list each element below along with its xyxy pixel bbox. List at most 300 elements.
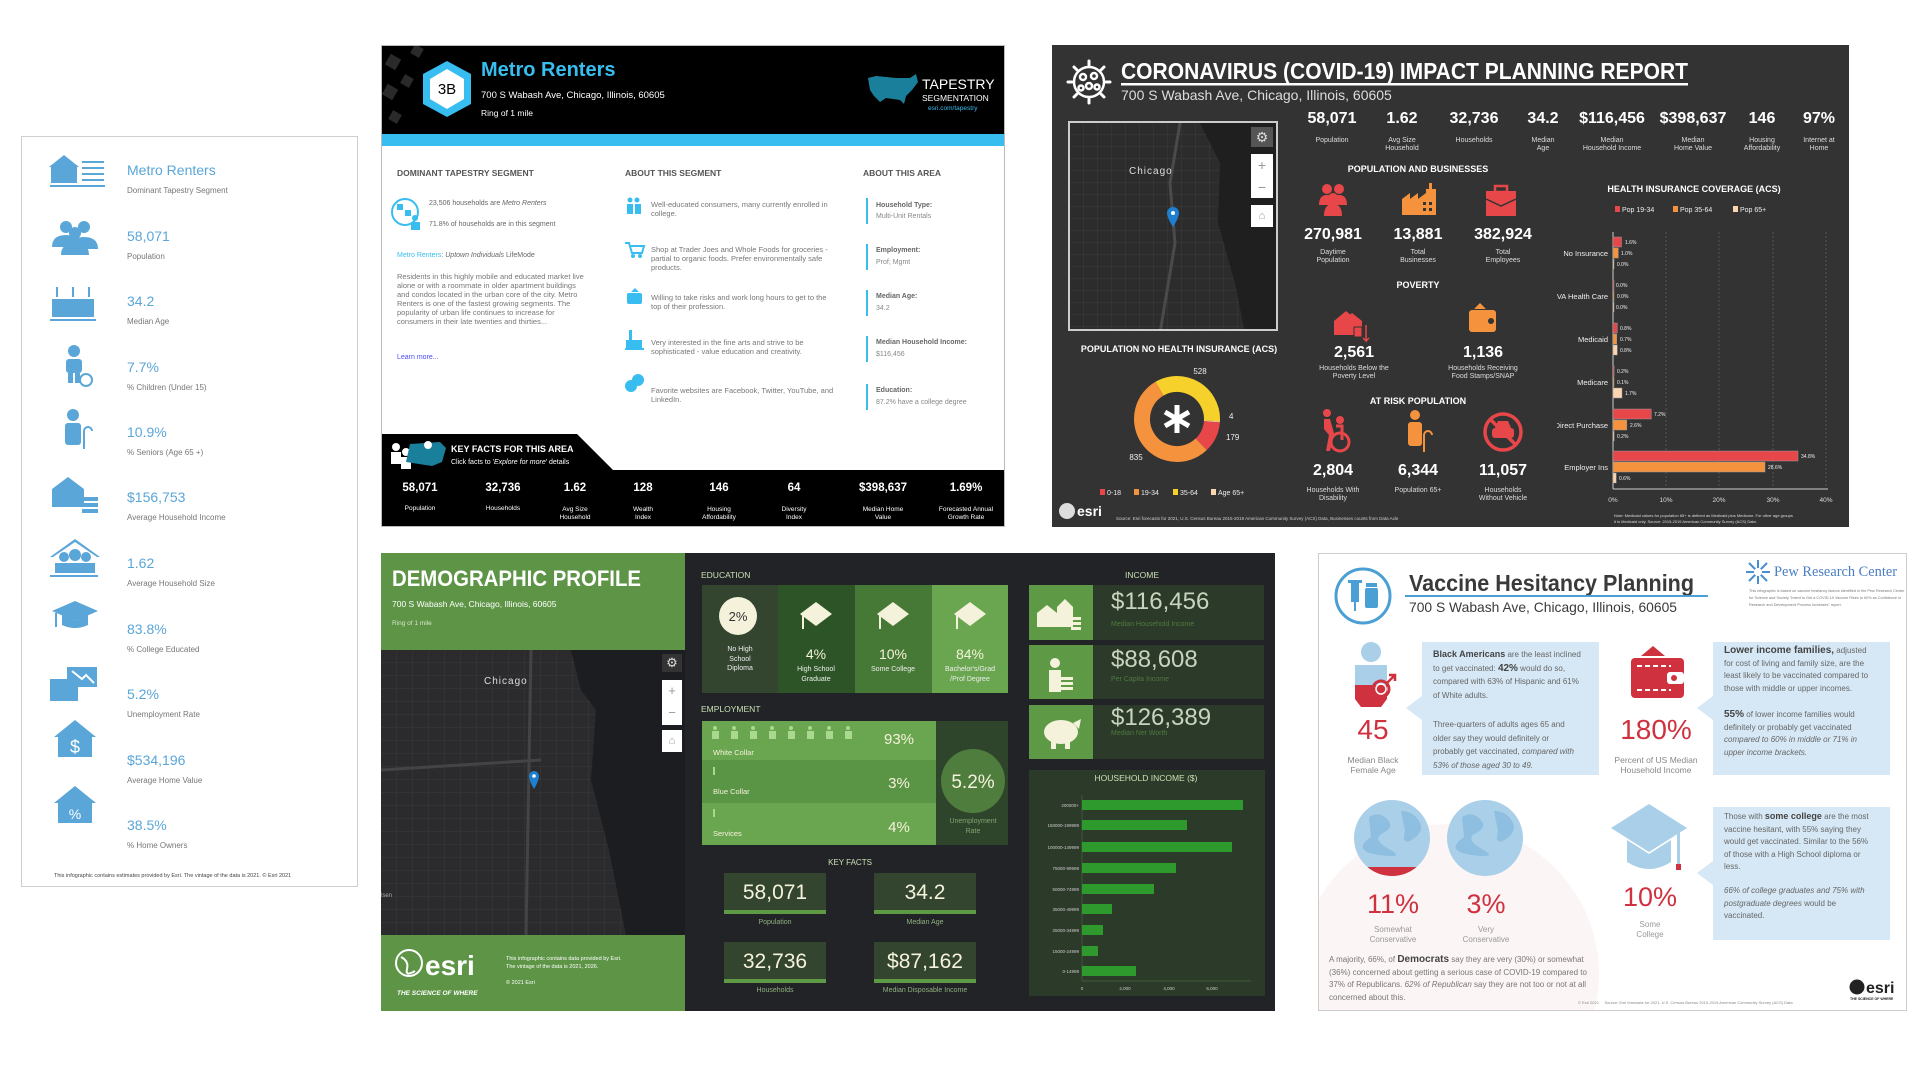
callout: black americans: of White adults. bbox=[1433, 690, 1488, 700]
panel: COVID-19 impact planning report: Avg Size bbox=[1388, 137, 1416, 144]
income section: Median Household Income bbox=[1111, 621, 1194, 628]
education section: School bbox=[729, 656, 751, 662]
panel: COVID-19 impact planning report: 32,736 bbox=[1450, 110, 1498, 127]
key facts band: Housing bbox=[707, 506, 731, 513]
panel: key facts list: $534,196 bbox=[127, 752, 185, 768]
key facts band: Avg Size bbox=[562, 506, 588, 513]
employment section bbox=[701, 704, 1008, 845]
text block: democrats bbox=[1329, 954, 1587, 1002]
callout: some college: less. bbox=[1724, 862, 1740, 871]
callout: lower income families: upper income brackets. bbox=[1724, 748, 1807, 756]
employment section: Blue Collar bbox=[713, 787, 750, 796]
key facts band: 146 bbox=[709, 482, 729, 494]
at risk population: 11,057 bbox=[1479, 462, 1527, 479]
donut section: 4 bbox=[1229, 412, 1234, 421]
column: dominant segment bbox=[391, 168, 584, 361]
stat: median black female age: Female Age bbox=[1350, 765, 1396, 775]
esri logo + source: esri bbox=[1077, 503, 1102, 519]
column: dominant segment: Metro Renters: Uptown Individuals LifeMode bbox=[397, 252, 535, 259]
key facts band: Household bbox=[559, 514, 591, 521]
callout: lower income families: for cost of living and family size, are the bbox=[1724, 658, 1864, 668]
globes: conservative: Conservative bbox=[1463, 935, 1509, 944]
column: about this area: Multi-Unit Rentals bbox=[876, 213, 931, 220]
panel: COVID-19 impact planning report: 700 S Wabash Ave, Chicago, Illinois, 60605 bbox=[1121, 87, 1392, 103]
callout: black americans: older say they would definitely or bbox=[1433, 734, 1549, 742]
panel: key facts list: $156,753 bbox=[127, 489, 185, 505]
map: + bbox=[668, 683, 676, 698]
panel: key facts list: % Home Owners bbox=[127, 841, 187, 850]
population and businesses: Employees bbox=[1486, 257, 1520, 264]
green footer with esri logo: © 2021 Esri bbox=[506, 980, 535, 986]
panel: key facts list: Average Home Value bbox=[127, 776, 202, 785]
bar chart: health insurance coverage: 10% bbox=[1659, 497, 1673, 504]
key facts band: Index bbox=[786, 514, 802, 521]
panel: key facts list: Unemployment Rate bbox=[127, 710, 200, 719]
column: about this segment bbox=[625, 168, 833, 404]
footer note: This infographic contains estimates provided by Esri. The vintage of the data is 2021. © Esri 2021 bbox=[54, 873, 291, 879]
bar chart: health insurance coverage: 0.2% bbox=[1617, 369, 1629, 375]
bar chart: health insurance coverage: Medicaid bbox=[1578, 335, 1608, 344]
bar chart: health insurance coverage: 0.7% bbox=[1620, 337, 1632, 343]
employment section: 93% bbox=[884, 731, 914, 748]
employment section: Rate bbox=[966, 828, 980, 835]
panel: demographic profile bbox=[381, 553, 1275, 1011]
key facts band: Click facts to 'Explore for more' details bbox=[451, 459, 569, 466]
income section: $88,608 bbox=[1111, 646, 1198, 673]
map bbox=[1068, 121, 1278, 331]
callout: lower income families: those with middle or upper incomes. bbox=[1724, 684, 1852, 692]
stat: median black female age: 45 bbox=[1357, 714, 1389, 745]
panel: key facts list: Median Age bbox=[127, 317, 169, 326]
key facts band: 1.69% bbox=[950, 482, 982, 494]
icon column: % bbox=[69, 806, 81, 822]
at risk population: Disability bbox=[1319, 495, 1347, 502]
donut section: Age 65+ bbox=[1218, 490, 1244, 497]
key facts: $87,162 bbox=[887, 950, 963, 973]
esri logo + source bbox=[1059, 503, 1398, 521]
bar chart: health insurance coverage: 0.1% bbox=[1617, 380, 1629, 386]
stat: some college: 10% bbox=[1623, 882, 1677, 912]
header band: 700 S Wabash Ave, Chicago, Illinois, 60605 bbox=[481, 90, 665, 101]
bar chart: household income: 2,000 bbox=[1119, 986, 1131, 991]
population and businesses: Total bbox=[1411, 249, 1425, 256]
green footer with esri logo bbox=[381, 935, 685, 1011]
panel: key facts list: Metro Renters bbox=[127, 162, 216, 178]
green header: Ring of 1 mile bbox=[392, 620, 432, 627]
icon: vaccine circle bbox=[1334, 568, 1392, 624]
callout: some college: vaccinated. bbox=[1724, 911, 1764, 920]
column: dominant segment: Learn more... bbox=[397, 354, 439, 361]
bar chart: health insurance coverage: 30% bbox=[1766, 497, 1780, 504]
column: about this segment: Favorite websites are Facebook, Twitter, YouTube, and LinkedIn. bbox=[651, 386, 833, 404]
icon: virus bbox=[1066, 60, 1112, 104]
column: about this segment: Willing to take risks and work long hours to get to the top of their profession. bbox=[651, 293, 827, 311]
header band: Metro Renters bbox=[481, 59, 615, 81]
callout: lower income families: least likely to be vaccinated compared to bbox=[1724, 671, 1868, 680]
poverty: Households Below the bbox=[1319, 365, 1389, 372]
globes: conservative: Very bbox=[1478, 925, 1494, 934]
panel: key facts list: Population bbox=[127, 252, 165, 261]
callout: black americans: 53% of those aged 30 to 49. bbox=[1433, 760, 1533, 770]
stat: some college: Some bbox=[1640, 920, 1660, 929]
green footer with esri logo: This infographic contains data provided by Esri. bbox=[506, 956, 622, 962]
employment section: Services bbox=[713, 829, 742, 838]
tapestry logo bbox=[868, 74, 995, 112]
esri logo: THE SCIENCE OF WHERE bbox=[1850, 997, 1894, 1001]
panel: COVID-19 impact planning report: Median bbox=[1601, 137, 1623, 144]
panel: Metro Renters tapestry bbox=[381, 45, 1005, 527]
callout: lower income families: definitely or probably get vaccinated bbox=[1724, 722, 1852, 732]
bar chart: health insurance coverage: it is Medicaid only. Source: 2015-2019 American Community Survey (ACS) Data. bbox=[1614, 519, 1757, 524]
column: about this area: 34.2 bbox=[876, 305, 890, 312]
key facts: KEY FACTS bbox=[828, 858, 872, 867]
key facts band: 64 bbox=[788, 482, 800, 494]
education section bbox=[701, 570, 1008, 693]
panel: key facts list: 10.9% bbox=[127, 424, 167, 440]
bar chart: health insurance coverage: 34.8% bbox=[1801, 454, 1816, 460]
key facts band: 32,736 bbox=[485, 482, 521, 494]
bar chart: household income: 100000-149999 bbox=[1047, 845, 1079, 850]
map: ⌂ bbox=[1259, 210, 1265, 222]
bar chart: health insurance coverage: Employer Ins bbox=[1564, 463, 1608, 472]
globes: conservative: 11% bbox=[1367, 889, 1419, 919]
panel: COVID-19 impact planning report: Home bbox=[1810, 145, 1828, 152]
text block: democrats: 37% of Republicans. 62% of Republican say they are not too or not at all bbox=[1329, 980, 1586, 989]
income section: Median Net Worth bbox=[1111, 730, 1167, 737]
tapestry logo: SEGMENTATION bbox=[922, 93, 989, 103]
hexagon badge 3B: 3B bbox=[438, 81, 456, 98]
poverty: Food Stamps/SNAP bbox=[1452, 373, 1514, 380]
column: about this segment: Shop at Trader Joes and Whole Foods for groceries - partial to organic foods. Prefer environmentally safe products. bbox=[651, 245, 828, 272]
key facts band: KEY FACTS FOR THIS AREA bbox=[451, 444, 574, 454]
callout: lower income families: Lower income families, adjusted bbox=[1724, 645, 1867, 656]
map bbox=[381, 650, 685, 935]
tapestry logo: TAPESTRY bbox=[922, 76, 995, 92]
panel: COVID-19 impact planning report: Median bbox=[1682, 137, 1704, 144]
icon column: $ bbox=[70, 737, 80, 757]
footer source: © Esri 2021 Source: Esri forecasts for 2021, U.S. Census Bureau 2015-2019 American Community Survey (ACS) Data bbox=[1578, 1000, 1793, 1005]
key facts band: Index bbox=[635, 514, 651, 521]
header band bbox=[382, 46, 1004, 146]
panel: key facts list: 5.2% bbox=[127, 686, 159, 702]
education section: Some College bbox=[871, 666, 915, 673]
panel: key facts list: 58,071 bbox=[127, 228, 170, 244]
column: dominant segment: DOMINANT TAPESTRY SEGMENT bbox=[397, 168, 534, 178]
bar chart: health insurance coverage: Note: Medicaid values for population 65+ is defined as Medicaid plus Medicare. For other age groups bbox=[1614, 513, 1793, 518]
income section: $116,456 bbox=[1111, 588, 1209, 615]
bar chart: health insurance coverage: 1.6% bbox=[1625, 240, 1637, 246]
at risk population: Households With bbox=[1307, 487, 1359, 494]
callout: black americans: to get vaccinated: 42% would do so, bbox=[1433, 662, 1565, 674]
income section bbox=[1029, 570, 1264, 759]
green header: DEMOGRAPHIC PROFILE bbox=[392, 566, 641, 591]
at risk population: Without Vehicle bbox=[1479, 495, 1527, 502]
key facts: 58,071 bbox=[743, 881, 807, 904]
callout: some college: postgraduate degrees would be bbox=[1724, 898, 1836, 908]
column: about this segment: ABOUT THIS SEGMENT bbox=[625, 168, 721, 178]
bar chart: household income: 35000-49999 bbox=[1052, 907, 1079, 912]
income section: INCOME bbox=[1125, 570, 1159, 580]
key facts: 32,736 bbox=[743, 950, 807, 973]
bar chart: health insurance coverage: 0.8% bbox=[1620, 348, 1632, 354]
header band: Ring of 1 mile bbox=[481, 108, 533, 118]
bar chart: health insurance coverage: Pop 35-64 bbox=[1680, 207, 1712, 214]
panel: COVID-19 impact planning report: Households bbox=[1456, 137, 1492, 144]
panel: key facts list: 34.2 bbox=[127, 293, 154, 309]
panel: COVID-19 impact planning report: Affordability bbox=[1744, 145, 1780, 152]
education section: /Prof Degree bbox=[950, 676, 990, 683]
poverty: 2,561 bbox=[1334, 344, 1374, 361]
column: about this area: Education: bbox=[876, 387, 912, 394]
panel: COVID-19 impact planning report: 97% bbox=[1803, 110, 1835, 127]
panel: key facts list: % College Educated bbox=[127, 645, 200, 654]
top stats row bbox=[1308, 110, 1835, 152]
column: about this area: ABOUT THIS AREA bbox=[863, 168, 941, 178]
panel: COVID-19 impact planning report: Median bbox=[1532, 137, 1554, 144]
key facts band: Forecasted Annual bbox=[939, 506, 993, 513]
column: about this area: Median Household Income: bbox=[876, 339, 967, 346]
panel: key facts list: 83.8% bbox=[127, 621, 167, 637]
population and businesses: POPULATION AND BUSINESSES bbox=[1348, 164, 1488, 174]
bar chart: household income: 200000+ bbox=[1061, 803, 1079, 808]
callout: black americans bbox=[1406, 642, 1599, 775]
key facts band: 58,071 bbox=[402, 482, 438, 494]
donut section: 179 bbox=[1226, 433, 1240, 442]
bar chart: health insurance coverage: 20% bbox=[1712, 497, 1726, 504]
bar chart: health insurance coverage: 28.6% bbox=[1768, 465, 1783, 471]
icon column bbox=[49, 155, 105, 823]
bar chart: household income: 0 bbox=[1081, 986, 1084, 991]
panel: COVID-19 impact planning report bbox=[1052, 45, 1849, 527]
panel: COVID-19 impact planning report: Housing bbox=[1749, 137, 1775, 144]
key facts band: Diversity bbox=[782, 506, 806, 513]
column: about this segment: Well-educated consumers, many currently enrolled in college. bbox=[651, 200, 828, 218]
callout: some college: of those with a High School diploma or bbox=[1724, 850, 1861, 858]
at risk population: 2,804 bbox=[1313, 462, 1353, 479]
column: about this area: Employment: bbox=[876, 247, 920, 254]
panel: key facts list: % Seniors (Age 65 +) bbox=[127, 448, 203, 457]
income section: $126,389 bbox=[1111, 704, 1211, 731]
column: about this area: Median Age: bbox=[876, 293, 917, 300]
education section: 84% bbox=[956, 646, 984, 662]
bar chart: health insurance coverage: 7.2% bbox=[1654, 412, 1666, 418]
stat: some college bbox=[1611, 804, 1687, 939]
panel: key facts list: Average Household Income bbox=[127, 513, 226, 522]
stat: 180% of US median income: Household Income bbox=[1621, 765, 1691, 775]
panel: COVID-19 impact planning report: 1.62 bbox=[1386, 110, 1418, 127]
key facts band: Value bbox=[875, 514, 891, 521]
bar chart: health insurance coverage: Pop 19-34 bbox=[1622, 207, 1654, 214]
education section: 4% bbox=[806, 646, 826, 662]
key facts: Median Age bbox=[907, 919, 943, 926]
column: about this segment: Very interested in the fine arts and strive to be sophisticated - value education and creativity. bbox=[651, 338, 804, 356]
map: + bbox=[1258, 157, 1266, 173]
map: Chicago bbox=[1129, 166, 1173, 177]
map: ⌂ bbox=[669, 735, 675, 747]
map: ⚙ bbox=[666, 655, 678, 670]
esri logo bbox=[1850, 980, 1894, 1001]
employment section: 3% bbox=[888, 775, 910, 792]
education section: High School bbox=[797, 666, 835, 673]
income section: Per Capita Income bbox=[1111, 676, 1169, 683]
employment section: 4% bbox=[888, 819, 910, 836]
bar chart: household income: 0-14999 bbox=[1062, 969, 1079, 974]
stat: 180% of US median income bbox=[1614, 646, 1698, 775]
title: Vaccine Hesitancy Planning bbox=[1409, 570, 1694, 596]
bar chart: health insurance coverage: 0.0% bbox=[1617, 294, 1629, 300]
panel: key facts list: % Children (Under 15) bbox=[127, 383, 207, 392]
key facts band: 1.62 bbox=[564, 482, 586, 494]
population and businesses: 382,924 bbox=[1474, 226, 1532, 243]
tapestry logo: esri.com/tapestry bbox=[928, 105, 978, 112]
bar chart: health insurance coverage: Pop 65+ bbox=[1740, 207, 1766, 214]
population and businesses bbox=[1304, 164, 1532, 264]
bar chart: household income: 4,000 bbox=[1163, 986, 1175, 991]
key facts: Population bbox=[758, 919, 792, 926]
panel: COVID-19 impact planning report: Household bbox=[1385, 145, 1419, 152]
education section: 10% bbox=[879, 646, 907, 662]
donut section: POPULATION NO HEALTH INSURANCE (ACS) bbox=[1081, 344, 1277, 354]
bar chart: health insurance coverage: VA Health Care bbox=[1557, 292, 1608, 301]
donut section bbox=[1081, 344, 1277, 497]
stat: median black female age bbox=[1347, 642, 1399, 775]
title bbox=[1405, 570, 1708, 615]
key facts band: Households bbox=[486, 505, 520, 512]
bar chart: health insurance coverage: No Insurance bbox=[1563, 249, 1608, 258]
bar chart: health insurance coverage: HEALTH INSURANCE COVERAGE (ACS) bbox=[1607, 184, 1781, 194]
poverty: Poverty Level bbox=[1333, 373, 1375, 380]
column: about this area bbox=[863, 168, 967, 410]
callout: black americans: probably get vaccinated, compared with bbox=[1433, 747, 1574, 756]
panel: COVID-19 impact planning report: $398,637 bbox=[1660, 110, 1726, 127]
population and businesses: 13,881 bbox=[1394, 226, 1442, 243]
panel: key facts list: 38.5% bbox=[127, 817, 167, 833]
green footer with esri logo: esri bbox=[425, 950, 475, 981]
donut section: 528 bbox=[1193, 367, 1207, 376]
key facts band: $398,637 bbox=[859, 482, 907, 494]
panel: key facts list: Dominant Tapestry Segment bbox=[127, 186, 228, 195]
bar chart: household income: 25000-34999 bbox=[1052, 928, 1079, 933]
education section: 2% bbox=[729, 609, 748, 624]
bar chart: health insurance coverage: 0.0% bbox=[1616, 283, 1628, 289]
bar chart: health insurance coverage: 40% bbox=[1819, 497, 1833, 504]
panel: key facts list: 1.62 bbox=[127, 555, 154, 571]
stat: 180% of US median income: 180% bbox=[1620, 714, 1692, 745]
poverty: 1,136 bbox=[1463, 344, 1503, 361]
bar chart: health insurance coverage: 0.0% bbox=[1616, 305, 1628, 311]
panel: COVID-19 impact planning report: Internet at bbox=[1803, 137, 1835, 144]
Pew Research Center logo bbox=[1746, 560, 1905, 607]
stat rows bbox=[127, 162, 228, 850]
bar chart: health insurance coverage: 0% bbox=[1608, 497, 1618, 504]
panel: COVID-19 impact planning report: Home Value bbox=[1674, 145, 1712, 152]
population and businesses: 270,981 bbox=[1304, 226, 1362, 243]
bar chart: health insurance coverage: 0.8% bbox=[1620, 326, 1632, 332]
education section: Diploma bbox=[727, 665, 753, 672]
globes: conservative: Somewhat bbox=[1374, 925, 1412, 934]
faint background globe bbox=[1319, 824, 1599, 1010]
map: ⚙ bbox=[1256, 129, 1268, 145]
education section: Graduate bbox=[801, 676, 831, 683]
green header bbox=[381, 553, 685, 650]
bar chart: household income: 50000-74999 bbox=[1052, 887, 1079, 892]
donut section: 19-34 bbox=[1141, 490, 1159, 497]
bar chart: health insurance coverage: Medicare bbox=[1577, 378, 1608, 387]
callout: lower income families bbox=[1697, 642, 1890, 775]
callout: some college: 66% of college graduates and 75% with bbox=[1724, 886, 1865, 895]
map: lsen bbox=[381, 893, 392, 899]
key facts: Households bbox=[757, 987, 793, 994]
callout: black americans: compared with 63% of Hispanic and 61% bbox=[1433, 677, 1579, 686]
green footer with esri logo: THE SCIENCE OF WHERE bbox=[397, 990, 478, 997]
map: − bbox=[668, 705, 676, 720]
text block: democrats: (36%) concerned about getting a serious case of COVID-19 compared to bbox=[1329, 968, 1587, 976]
Pew Research Center logo: This infographic is based on vaccine hesitancy factors identified in the Pew Research Center for Science and Society "Intent to Get a COVID-19 Vaccine Rises to 60% as Confidence in Research and Development Process Increases" report. bbox=[1749, 589, 1905, 607]
panel: vaccine hesitancy planning bbox=[1318, 553, 1907, 1011]
panel: COVID-19 impact planning report: Population bbox=[1315, 137, 1349, 144]
Pew Research Center logo: Pew Research Center bbox=[1774, 564, 1897, 580]
at risk population: Households bbox=[1485, 487, 1521, 494]
callout: black americans: Black Americans are the least inclined bbox=[1433, 649, 1581, 659]
key facts band: Population bbox=[405, 505, 435, 512]
callout: black americans: Three-quarters of adults ages 65 and bbox=[1433, 720, 1565, 729]
esri logo + source: Source: Esri forecasts for 2021, U.S. Census Bureau 2015-2019 American Community Survey (ACS) Data, Businesses counts from Data Axle bbox=[1116, 516, 1398, 521]
at risk population bbox=[1307, 396, 1527, 502]
bar chart: health insurance coverage bbox=[1557, 184, 1833, 524]
poverty: POVERTY bbox=[1396, 280, 1440, 290]
panel: key facts list: 7.7% bbox=[127, 359, 159, 375]
callout: some college: vaccine hesitant, with 55% saying they bbox=[1724, 824, 1861, 834]
text block: democrats: A majority, 66%, of Democrats say they are very (30%) or somewhat bbox=[1329, 954, 1584, 965]
bar chart: health insurance coverage: 2.6% bbox=[1630, 423, 1642, 429]
key facts band: Growth Rate bbox=[948, 514, 984, 521]
employment section: EMPLOYMENT bbox=[701, 704, 761, 714]
panel: COVID-19 impact planning report: 146 bbox=[1749, 110, 1775, 127]
employment section: Unemployment bbox=[949, 818, 997, 825]
donut section: 35-64 bbox=[1180, 490, 1198, 497]
bar chart: household income: HOUSEHOLD INCOME ($) bbox=[1095, 773, 1197, 783]
callout: some college: Those with some college are the most bbox=[1724, 811, 1869, 821]
panel: key facts list bbox=[21, 136, 358, 887]
column: dominant segment: 23,506 households are Metro Renters bbox=[429, 200, 547, 207]
hexagon badge 3B bbox=[423, 61, 471, 117]
globes: conservative bbox=[1354, 800, 1523, 944]
panel: COVID-19 impact planning report: 58,071 bbox=[1308, 110, 1356, 127]
key facts band: Wealth bbox=[633, 506, 653, 513]
callout: lower income families: compared to 60% in middle or 71% in bbox=[1724, 735, 1857, 744]
at risk population: Population 65+ bbox=[1395, 487, 1441, 494]
population and businesses: Population bbox=[1316, 257, 1350, 264]
callout: some college bbox=[1697, 807, 1890, 940]
education section: No High bbox=[727, 646, 753, 653]
title: CORONAVIRUS (COVID-19) IMPACT PLANNING REPORT bbox=[1121, 58, 1688, 84]
panel: COVID-19 impact planning report: Household Income bbox=[1583, 145, 1641, 152]
at risk population: 6,344 bbox=[1398, 462, 1438, 479]
stat: 180% of US median income: Percent of US Median bbox=[1614, 755, 1698, 765]
column: about this area: Prof; Mgmt bbox=[876, 259, 910, 266]
callout: lower income families: 55% of lower income families would bbox=[1724, 709, 1855, 720]
key facts band bbox=[382, 434, 1004, 526]
green footer with esri logo: The vintage of the data is 2021, 2026. bbox=[506, 964, 598, 970]
column: about this area: 87.2% have a college degree bbox=[876, 399, 967, 406]
employment section: 5.2% bbox=[951, 772, 995, 793]
map: − bbox=[1258, 179, 1266, 195]
poverty: Households Receiving bbox=[1448, 365, 1518, 372]
bar chart: household income: 75000-99999 bbox=[1052, 866, 1079, 871]
key facts band: 128 bbox=[633, 482, 653, 494]
text block: democrats: concerned about this. bbox=[1329, 992, 1406, 1002]
bar chart: household income: 15000-24999 bbox=[1052, 949, 1079, 954]
